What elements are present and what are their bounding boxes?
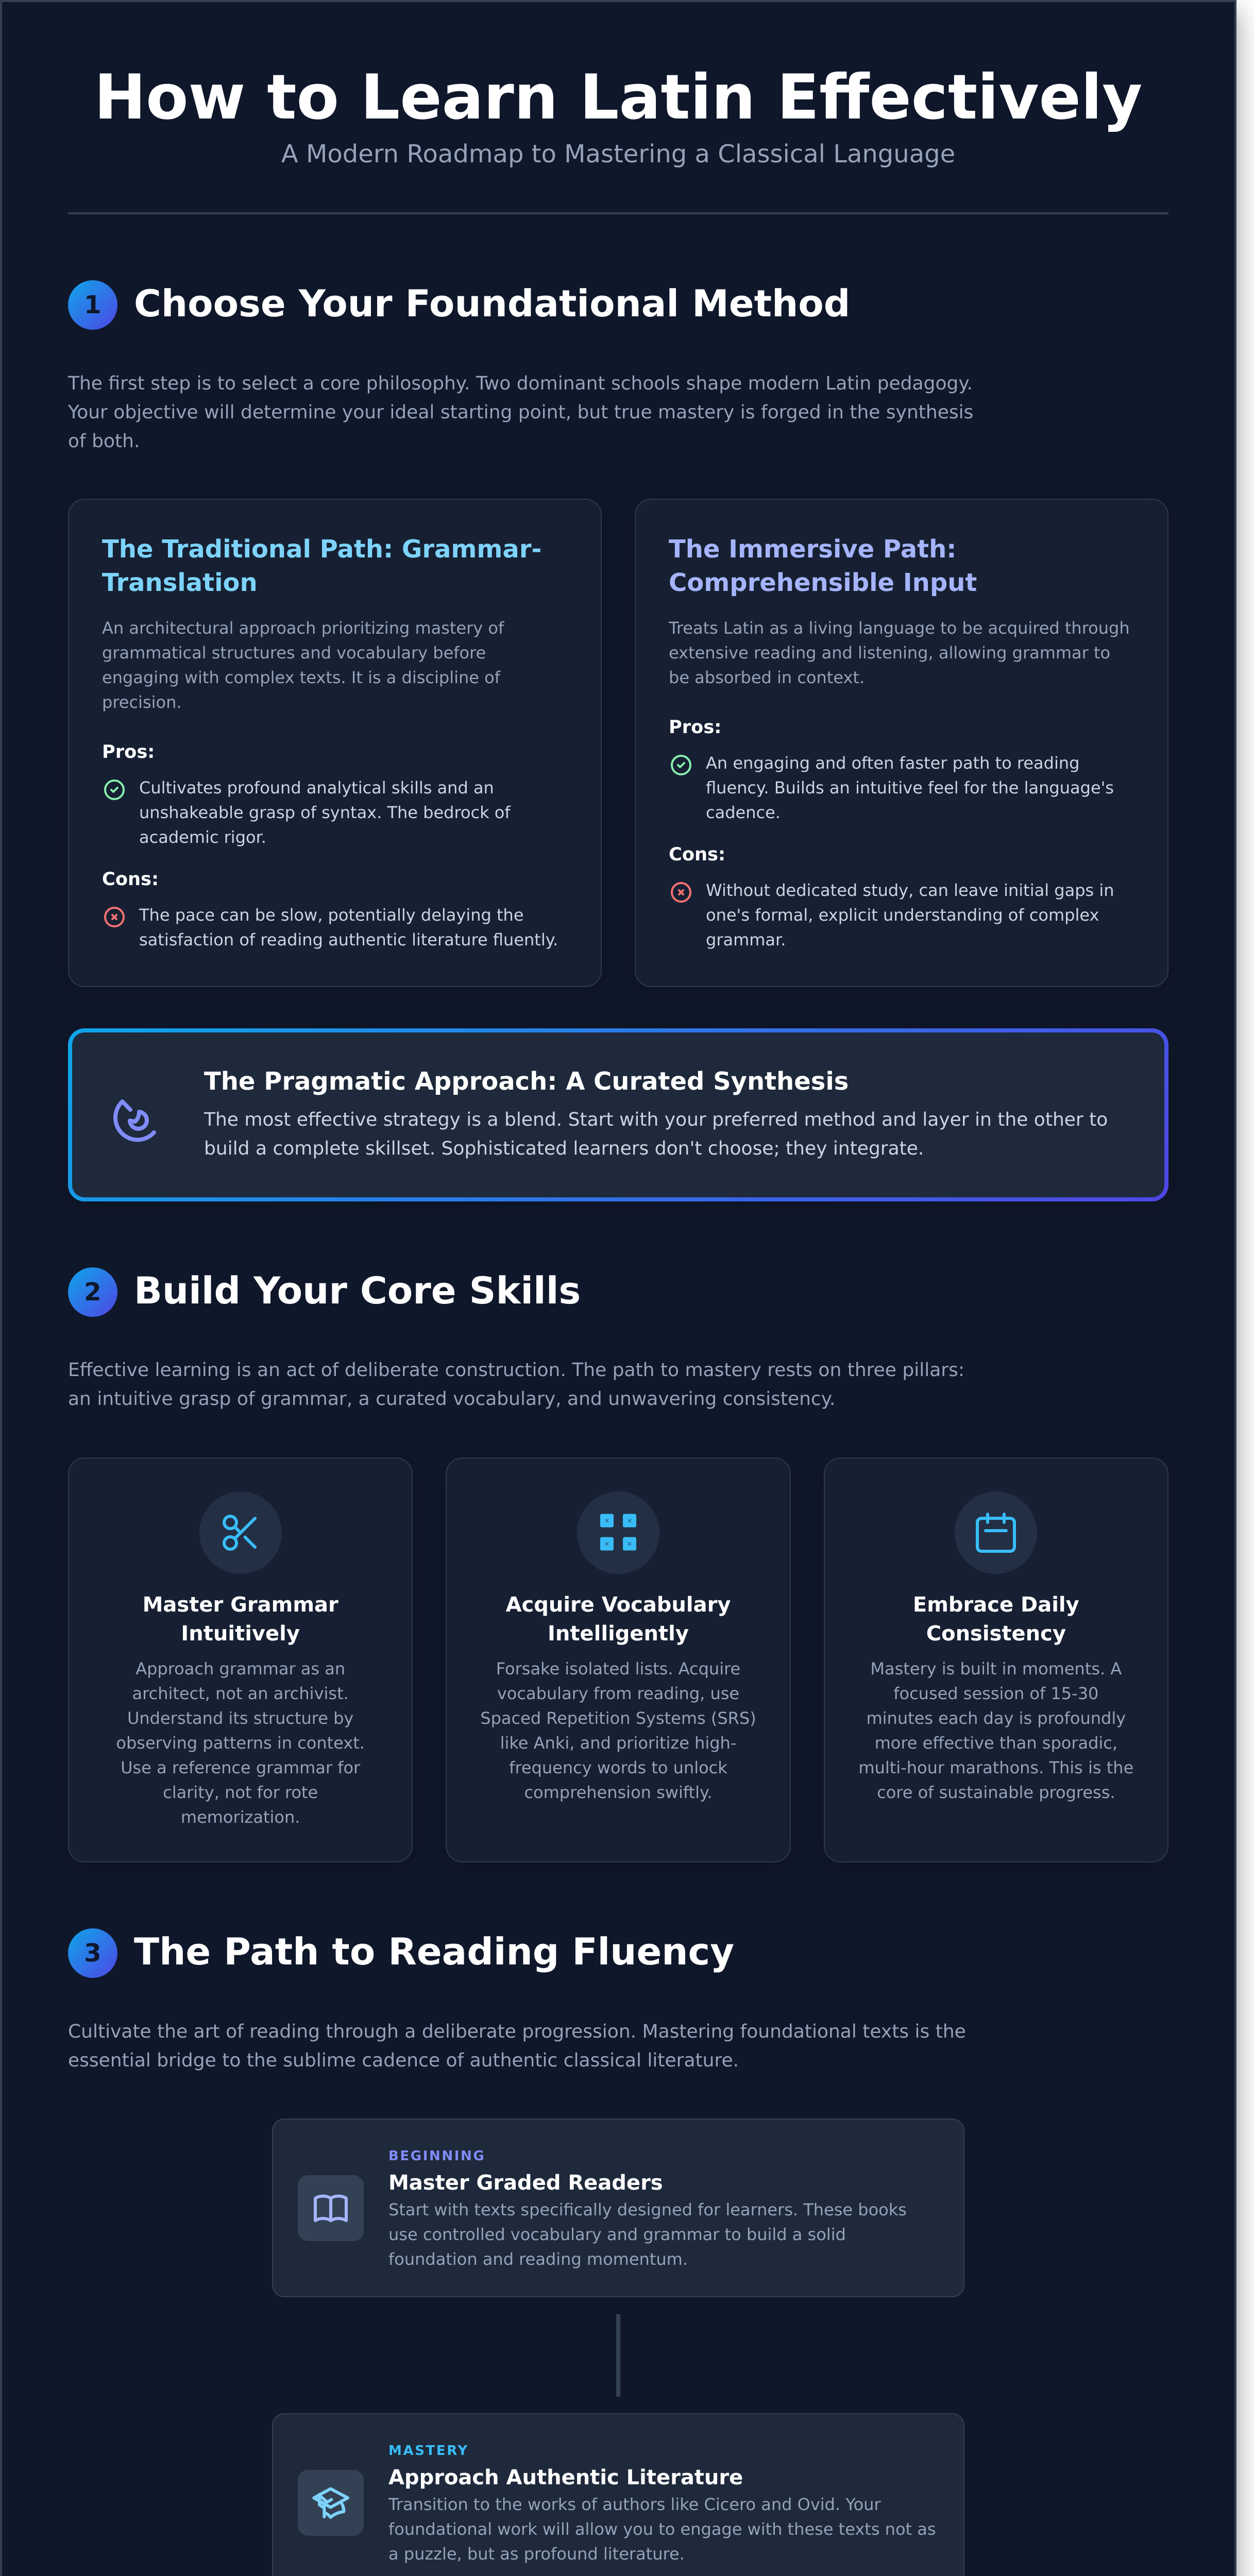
panel: acquire vocabulary xyxy=(446,1458,791,1862)
heading: immersive path: The Immersive Path: xyxy=(669,535,956,564)
section 2 heading: 2 xyxy=(84,1278,101,1307)
arrow: connector between steps xyxy=(616,2314,620,2397)
panel: traditional path xyxy=(68,499,602,987)
heading: acquire vocabulary xyxy=(480,1590,757,1648)
label: cons: Cons: xyxy=(102,869,159,890)
list item: immersive con: one's formal, explicit understanding of complex xyxy=(706,905,1099,925)
panel: authentic literature step xyxy=(272,2413,964,2576)
heading: traditional path xyxy=(102,535,541,597)
icon: calendar xyxy=(955,1492,1037,1574)
text: graded readers: use controlled vocabulary and grammar to build a solid xyxy=(388,2225,846,2244)
text: acquire vocabulary: comprehension swiftly. xyxy=(524,1783,713,1802)
text: authentic literature: Transition to the works of authors like Cicero and Ovid. Your xyxy=(388,2495,881,2514)
icon: scissors xyxy=(199,1492,282,1574)
text: master grammar: memorization. xyxy=(181,1807,300,1827)
text: immersive description: extensive reading and listening, allowing grammar to xyxy=(669,643,1110,663)
panel: graded readers step xyxy=(272,2119,964,2297)
heading: master grammar: Master Grammar xyxy=(143,1593,338,1617)
heading: daily consistency: Consistency xyxy=(926,1622,1066,1646)
panel: daily consistency xyxy=(824,1458,1168,1862)
text: traditional description: precision. xyxy=(102,692,182,712)
section 2 intro text: an intuitive grasp of grammar, a curated vocabulary, and unwavering consistency. xyxy=(68,1388,835,1410)
section 3 intro text: Cultivate the art of reading through a deliberate progression. Mastering foundational texts is the xyxy=(68,2021,966,2042)
list item: traditional pro: academic rigor. xyxy=(139,827,266,847)
section 1 heading: Choose Your Foundational Method xyxy=(134,282,850,325)
icon: grid xyxy=(577,1492,659,1574)
title: How to Learn Latin Effectively xyxy=(94,62,1142,133)
list item: traditional pro xyxy=(104,778,511,847)
text: acquire vocabulary: like Anki, and prioritize high- xyxy=(500,1733,736,1753)
text: traditional description: engaging with complex texts. It is a discipline of xyxy=(102,668,500,687)
text: master grammar: clarity, not for rote xyxy=(163,1783,318,1802)
text: pragmatic description: build a complete skillset. Sophisticated learners don't choose; they integrate. xyxy=(204,1138,924,1159)
heading: traditional path: The Traditional Path: Grammar- xyxy=(102,535,541,564)
text: pragmatic description xyxy=(204,1109,1108,1159)
list item: immersive con: grammar. xyxy=(706,930,786,950)
panel: immersive path xyxy=(635,499,1168,987)
label: pros: Pros: xyxy=(669,717,721,738)
text: pragmatic description: The most effective strategy is a blend. Start with your preferred method and layer in the other to xyxy=(204,1109,1108,1130)
list item: immersive pro: fluency. Builds an intuitive feel for the language's xyxy=(706,778,1114,798)
heading: acquire vocabulary: Acquire Vocabulary xyxy=(506,1593,731,1617)
list item: immersive pro: cadence. xyxy=(706,803,781,822)
subtitle: A Modern Roadmap to Mastering a Classical Language xyxy=(281,140,955,168)
icon: graduation cap xyxy=(298,2470,364,2536)
heading: immersive path xyxy=(669,535,977,597)
heading: acquire vocabulary: Intelligently xyxy=(548,1622,689,1646)
panel: master grammar xyxy=(68,1458,413,1862)
heading: master grammar xyxy=(143,1593,338,1646)
list item: traditional pro: unshakeable grasp of syntax. The bedrock of xyxy=(139,803,511,822)
section 1 intro text xyxy=(68,373,973,452)
text: daily consistency xyxy=(858,1656,1134,1805)
text: master grammar: Understand its structure by xyxy=(127,1708,353,1728)
icon: open book xyxy=(298,2175,364,2241)
list item: immersive con xyxy=(671,880,1114,950)
text: acquire vocabulary: Forsake isolated lists. Acquire xyxy=(496,1659,740,1679)
text: traditional description xyxy=(102,618,504,712)
section 1 intro text: The first step is to select a core philosophy. Two dominant schools shape modern Latin pedagogy. xyxy=(68,373,973,394)
list item: traditional con: satisfaction of reading authentic literature fluently. xyxy=(139,930,558,950)
heading: traditional path: Translation xyxy=(102,568,258,597)
text: daily consistency: Mastery is built in moments. A xyxy=(870,1659,1122,1679)
section 3 heading: 3 xyxy=(84,1939,101,1968)
text: daily consistency: more effective than sporadic, xyxy=(875,1733,1117,1753)
text: graded readers: BEGINNING xyxy=(388,2148,485,2164)
text: daily consistency: core of sustainable progress. xyxy=(877,1783,1115,1802)
text: acquire vocabulary xyxy=(480,1656,757,1805)
list item: traditional pro: Cultivates profound analytical skills and an xyxy=(139,778,494,798)
text: acquire vocabulary: Spaced Repetition Systems (SRS) xyxy=(480,1708,756,1728)
text: graded readers: Master Graded Readers xyxy=(388,2171,663,2195)
text: master grammar: Use a reference grammar for xyxy=(121,1758,360,1777)
icon: blend swirl xyxy=(113,1099,156,1142)
section 3 heading xyxy=(68,1928,1168,1978)
label: pros: Pros: xyxy=(102,741,155,762)
text: graded readers: Start with texts specifically designed for learners. These books xyxy=(388,2200,907,2219)
text: authentic literature: MASTERY xyxy=(388,2443,469,2459)
section 2 intro text: Effective learning is an act of deliberate construction. The path to mastery rests on three pillars: xyxy=(68,1360,964,1381)
label: cons: Cons: xyxy=(669,844,725,865)
section 1 heading: 1 xyxy=(84,291,101,319)
section 1 intro text: Your objective will determine your ideal starting point, but true mastery is forged in the synthesis xyxy=(68,402,973,423)
text: immersive description: Treats Latin as a living language to be acquired through xyxy=(669,618,1130,638)
heading: immersive path: Comprehensible Input xyxy=(669,568,977,597)
text: immersive description: be absorbed in context. xyxy=(669,668,865,687)
list item: traditional con xyxy=(104,905,558,950)
text: daily consistency: multi-hour marathons. This is the xyxy=(858,1758,1133,1777)
heading: daily consistency xyxy=(858,1590,1134,1648)
text: authentic literature: Approach Authentic Literature xyxy=(388,2466,743,2489)
text: master grammar: observing patterns in context. xyxy=(116,1733,365,1753)
list item: immersive con: Without dedicated study, can leave initial gaps in xyxy=(706,880,1114,900)
text: master grammar: architect, not an archivist. xyxy=(132,1684,349,1703)
list item: immersive pro xyxy=(671,753,1114,822)
text: daily consistency: minutes each day is profoundly xyxy=(866,1708,1126,1728)
text: master grammar: Approach grammar as an xyxy=(135,1659,345,1679)
text: authentic literature: a puzzle, but as profound literature. xyxy=(388,2544,685,2564)
section 1 intro text: of both. xyxy=(68,431,140,452)
heading: master grammar: Intuitively xyxy=(181,1622,300,1646)
text: traditional description: An architectural approach prioritizing mastery of xyxy=(102,618,504,638)
text: acquire vocabulary: vocabulary from reading, use xyxy=(497,1684,739,1703)
text: graded readers: foundation and reading momentum. xyxy=(388,2249,688,2269)
text: authentic literature: foundational work will allow you to engage with these texts not as xyxy=(388,2519,936,2539)
text: acquire vocabulary: frequency words to unlock xyxy=(509,1758,727,1777)
section 2 heading: Build Your Core Skills xyxy=(134,1269,581,1312)
heading: pragmatic approach: The Pragmatic Approach: A Curated Synthesis xyxy=(204,1067,849,1096)
text: traditional description: grammatical structures and vocabulary before xyxy=(102,643,486,663)
text: daily consistency: focused session of 15-30 xyxy=(893,1684,1098,1703)
list item: traditional con: The pace can be slow, potentially delaying the xyxy=(139,905,523,925)
section 3 intro text: essential bridge to the sublime cadence of authentic classical literature. xyxy=(68,2050,739,2071)
text: master grammar xyxy=(116,1659,365,1827)
section 3 heading: The Path to Reading Fluency xyxy=(134,1930,734,1973)
text: graded readers xyxy=(388,2144,907,2272)
list item: immersive pro: An engaging and often faster path to reading xyxy=(706,753,1079,773)
text: authentic literature xyxy=(388,2439,936,2566)
section 2 intro text xyxy=(68,1360,964,1410)
callout: pragmatic approach xyxy=(68,1028,1168,1201)
text: immersive description xyxy=(669,618,1130,687)
section 3 intro text xyxy=(68,2018,966,2075)
heading: daily consistency: Embrace Daily xyxy=(913,1593,1079,1617)
